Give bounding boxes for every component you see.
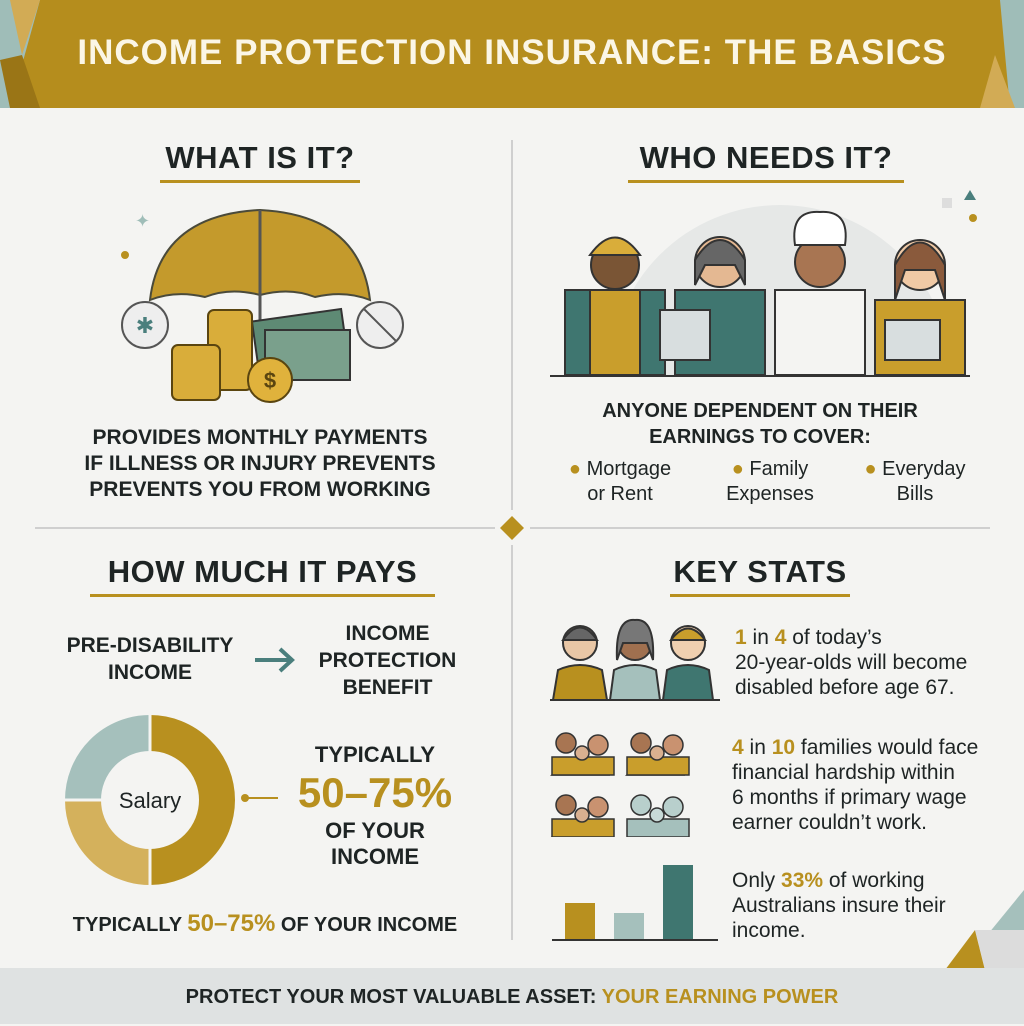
heading: what is it: WHAT IS IT? bbox=[165, 140, 355, 175]
text: pre-disability income bbox=[67, 634, 233, 684]
text: income protection benefit: BENEFIT bbox=[343, 676, 432, 699]
icon: umbrella with coins and money: $ bbox=[264, 368, 276, 393]
text: summary: TYPICALLY 50–75% OF YOUR INCOME bbox=[73, 910, 457, 937]
icon: three young people bbox=[550, 618, 720, 701]
bullet list: Bills bbox=[897, 483, 933, 505]
icon: four families bbox=[550, 732, 690, 837]
text: who needs it: EARNINGS TO COVER: bbox=[649, 426, 871, 448]
illustration: four workers bbox=[550, 190, 977, 377]
text: what is it description: PROVIDES MONTHLY PAYMENTS bbox=[93, 426, 427, 449]
footer banner bbox=[0, 968, 1024, 1024]
text: income protection benefit bbox=[319, 622, 456, 699]
bullet list: ● Mortgage bbox=[569, 458, 671, 480]
text: who needs it bbox=[602, 400, 918, 448]
stat: 1 in 4: 20-year-olds will become bbox=[735, 651, 967, 674]
donut chart: salary: Salary bbox=[119, 788, 181, 813]
stat: 4 in 10 bbox=[732, 736, 978, 834]
stat: 33%: Australians insure their bbox=[732, 894, 946, 917]
title: INCOME PROTECTION INSURANCE: THE BASICS bbox=[77, 33, 947, 72]
icon: umbrella with coins and money bbox=[121, 209, 404, 403]
stat: 4 in 10: earner couldn’t work. bbox=[732, 811, 927, 834]
text: what is it description: IF ILLNESS OR INJURY PREVENTS bbox=[84, 452, 436, 475]
callout: typically 50-75%: 50–75% bbox=[298, 769, 452, 816]
donut chart: salary bbox=[65, 715, 278, 885]
bar chart bbox=[552, 865, 718, 941]
text: income protection benefit: INCOME bbox=[346, 622, 430, 645]
stat: 4 in 10: 4 in 10 families would face bbox=[732, 736, 978, 759]
callout: typically 50-75%: OF YOUR bbox=[325, 818, 425, 843]
header banner bbox=[0, 0, 1024, 108]
bullet list: Expenses bbox=[726, 483, 814, 505]
icon: umbrella with coins and money: ✱ bbox=[136, 313, 154, 338]
text: pre-disability income: PRE-DISABILITY bbox=[67, 634, 233, 657]
stat: 4 in 10: 6 months if primary wage bbox=[732, 786, 967, 809]
bullet list bbox=[569, 458, 966, 505]
stat: 1 in 4: disabled before age 67. bbox=[735, 676, 955, 699]
callout: typically 50-75%: TYPICALLY bbox=[315, 742, 435, 767]
text: what is it description bbox=[84, 426, 436, 501]
callout: typically 50-75%: INCOME bbox=[331, 844, 419, 869]
text: who needs it: ANYONE DEPENDENT ON THEIR bbox=[602, 400, 918, 422]
stat: 1 in 4: 1 in 4 of today’s bbox=[735, 626, 882, 649]
bullet list: ● Everyday bbox=[864, 458, 966, 480]
arrow bbox=[255, 648, 295, 672]
heading: how much it pays: HOW MUCH IT PAYS bbox=[108, 554, 417, 589]
text: what is it description: PREVENTS YOU FROM WORKING bbox=[89, 478, 431, 501]
heading: key stats: KEY STATS bbox=[673, 554, 847, 589]
heading: who needs it: WHO NEEDS IT? bbox=[640, 140, 892, 175]
footer banner: PROTECT YOUR MOST VALUABLE ASSET: YOUR EARNING POWER bbox=[186, 986, 838, 1008]
bullet list: ● Family bbox=[732, 458, 808, 480]
text: income protection benefit: PROTECTION bbox=[319, 649, 456, 672]
callout: typically 50-75% bbox=[298, 742, 452, 869]
bullet list: or Rent bbox=[587, 483, 653, 505]
text: pre-disability income: INCOME bbox=[108, 661, 192, 684]
stat: 33% bbox=[732, 869, 946, 942]
icon: umbrella with coins and money: ✦ bbox=[135, 211, 150, 231]
stat: 33%: Only 33% of working bbox=[732, 869, 925, 892]
stat: 4 in 10: financial hardship within bbox=[732, 761, 955, 784]
stat: 33%: income. bbox=[732, 919, 806, 942]
stat: 1 in 4 bbox=[735, 626, 967, 699]
